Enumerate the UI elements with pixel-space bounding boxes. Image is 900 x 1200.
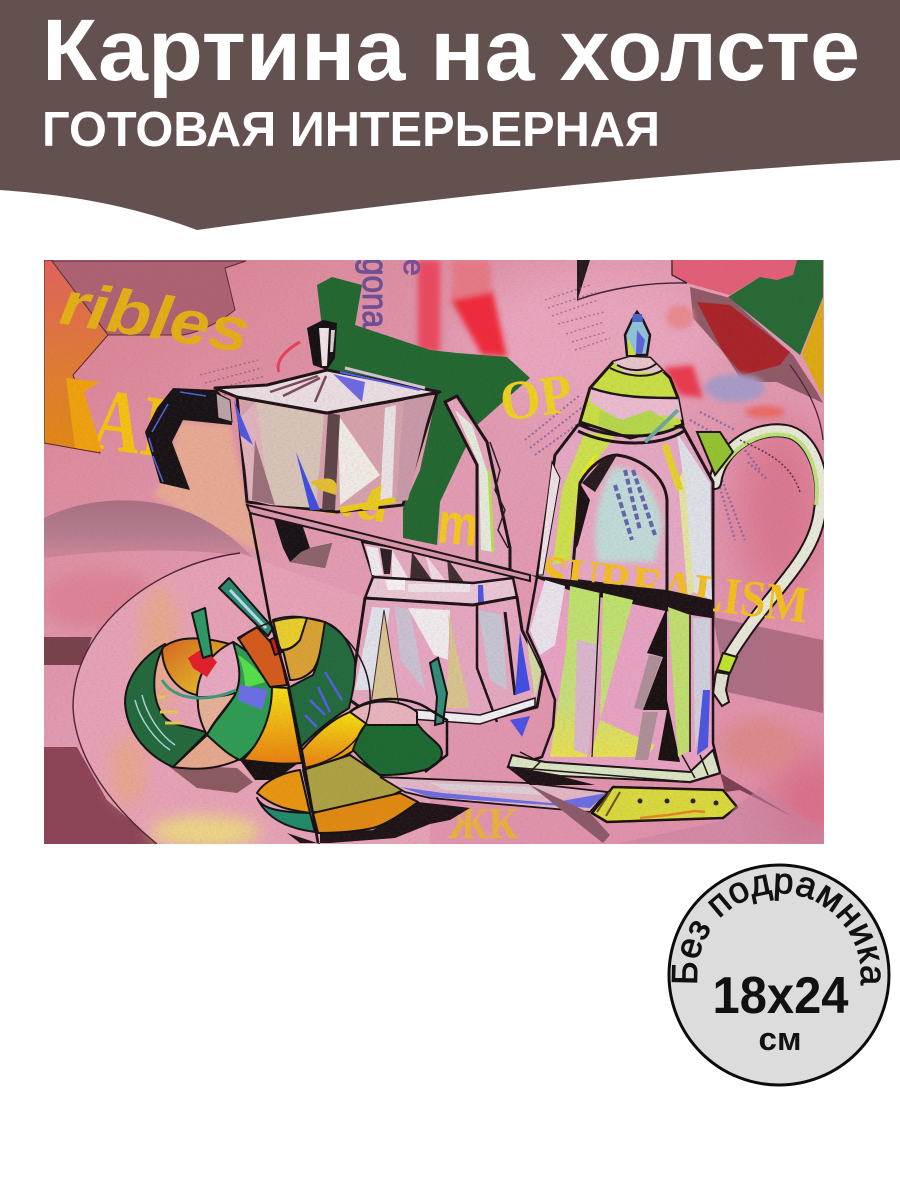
letter fragment H bbox=[66, 378, 102, 452]
red letter R bbox=[418, 260, 507, 357]
coffee pot bbox=[508, 312, 822, 782]
yellow lettering bbox=[56, 269, 576, 848]
right mauve band bbox=[713, 617, 823, 713]
panel: canvas painting bbox=[40, 258, 850, 850]
size badge bbox=[668, 864, 890, 1086]
shadow under apples bbox=[167, 760, 470, 844]
base bbox=[508, 750, 720, 782]
vertical cut line bbox=[250, 513, 318, 843]
handle leaf joint bbox=[697, 432, 733, 475]
top right shapes bbox=[577, 260, 823, 440]
word tribles: ribles bbox=[56, 269, 254, 367]
black wedge of cut bbox=[530, 575, 713, 617]
purple letter e: e bbox=[397, 259, 430, 276]
title: Картина на холсте bbox=[42, 2, 860, 99]
word surrealism: SUREALISM bbox=[539, 545, 811, 635]
newspaper dotted print bbox=[200, 285, 768, 540]
subtitle: ГОТОВАЯ ИНТЕРЬЕРНАЯ bbox=[42, 103, 660, 157]
collar bbox=[365, 577, 517, 605]
peach area under handle bbox=[153, 422, 262, 552]
front fruit bbox=[257, 702, 442, 833]
canvas texture overlay bbox=[44, 260, 824, 844]
badge circle bbox=[669, 865, 889, 1085]
word OP: OP bbox=[496, 362, 576, 434]
right apple bbox=[219, 578, 367, 768]
thin outline circle bbox=[238, 618, 370, 768]
plate bbox=[73, 553, 800, 848]
purple word gona: gona bbox=[355, 258, 396, 329]
knife blade bbox=[380, 777, 607, 812]
lower body bbox=[508, 577, 720, 782]
pink handle outline bbox=[278, 342, 300, 372]
lid bbox=[215, 368, 440, 413]
handle collar bbox=[717, 653, 737, 673]
black wedge below cut bbox=[273, 516, 332, 568]
left apple bbox=[125, 608, 273, 769]
right arm of pot bbox=[445, 396, 510, 570]
green torn shape bbox=[317, 277, 530, 545]
bowl rim bbox=[350, 699, 447, 772]
lower body bbox=[350, 597, 543, 737]
letters HAI: AI bbox=[87, 371, 174, 477]
curved handle bbox=[715, 430, 822, 655]
handle tip bbox=[713, 672, 729, 706]
dark stripe left bbox=[44, 637, 92, 665]
arch inner bbox=[572, 455, 667, 592]
finial bbox=[625, 312, 650, 355]
upper body bbox=[234, 393, 437, 512]
neck bbox=[362, 542, 513, 583]
mauve semicircle bbox=[44, 500, 253, 558]
upper body bbox=[537, 425, 713, 617]
background shapes bbox=[44, 260, 823, 844]
word ulum: ulu bbox=[305, 471, 392, 532]
letter m: m bbox=[435, 490, 481, 559]
unit: см bbox=[758, 1021, 802, 1057]
small cyrillic letters: ЖК bbox=[448, 799, 518, 848]
brown polyhedron top left bbox=[52, 261, 246, 335]
pot shadows on table bbox=[508, 768, 823, 843]
banner shape bbox=[0, 0, 900, 230]
knife handle bbox=[592, 787, 737, 822]
moka pot bbox=[145, 320, 543, 737]
bowl stem bbox=[430, 658, 447, 725]
header banner bbox=[0, 0, 900, 230]
newspaper text bbox=[355, 260, 420, 328]
cut diagonal band bbox=[247, 505, 530, 581]
dark block bottom left bbox=[44, 747, 157, 844]
curved label: Без подрамника bbox=[672, 873, 881, 986]
size number: 18x24 bbox=[712, 967, 849, 1025]
orange left wedge bbox=[44, 260, 108, 453]
dome bbox=[578, 357, 684, 443]
knob bbox=[307, 320, 337, 370]
apples bbox=[125, 513, 470, 844]
black handle bbox=[145, 388, 232, 490]
